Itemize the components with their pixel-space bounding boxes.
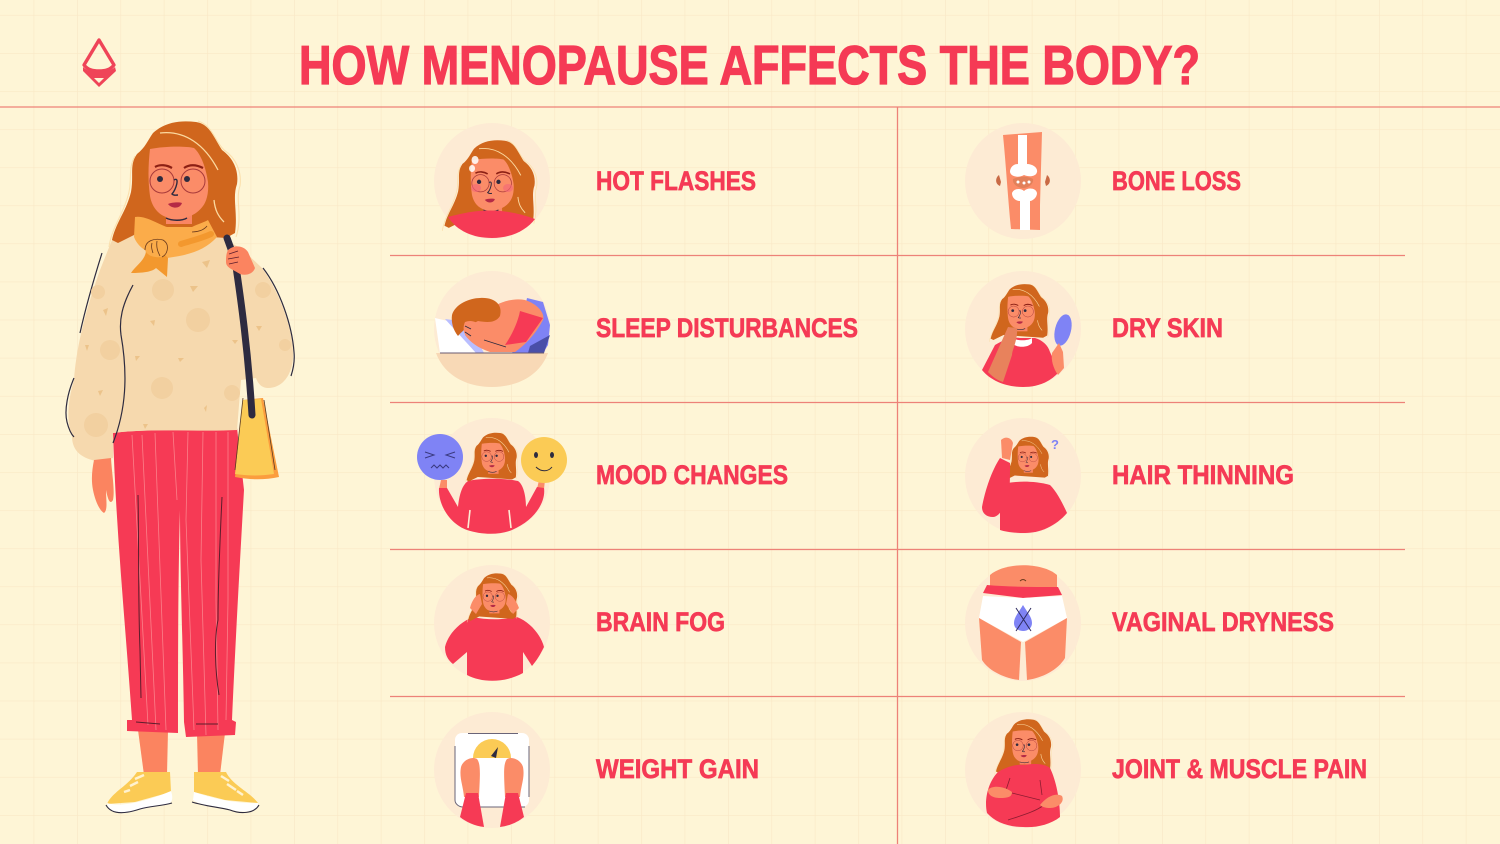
red top <box>505 311 543 345</box>
label: weight gain: WEIGHT GAIN <box>596 754 759 784</box>
raised arm <box>982 458 1010 517</box>
cheeks <box>471 184 513 192</box>
item: joint and muscle pain <box>965 712 1081 828</box>
sweater <box>66 232 294 461</box>
head <box>995 719 1052 775</box>
head <box>1004 437 1050 481</box>
lower bone <box>1012 189 1037 230</box>
scale <box>455 733 529 807</box>
label: mood changes: MOOD CHANGES <box>596 460 788 490</box>
woman figure <box>66 121 294 813</box>
sweater <box>986 764 1060 827</box>
sleeping body <box>465 299 543 352</box>
right trouser leg <box>500 793 524 827</box>
icon circle <box>434 418 550 534</box>
icon circle <box>434 712 550 828</box>
item: vaginal dryness <box>965 565 1081 681</box>
right thigh <box>1025 618 1067 680</box>
needle <box>491 747 498 758</box>
sweater <box>1000 482 1067 533</box>
crossed arm lines <box>1006 778 1044 820</box>
waistband <box>983 585 1062 598</box>
right foot <box>504 758 524 797</box>
collar <box>1012 338 1032 347</box>
icon circle <box>434 271 550 387</box>
right hand <box>1040 795 1063 808</box>
mirror <box>1051 313 1075 347</box>
icon circle <box>434 123 550 239</box>
label: brain fog: BRAIN FOG <box>596 607 725 637</box>
left trouser leg <box>460 793 484 827</box>
gauge <box>473 739 511 758</box>
icon circle <box>434 565 550 681</box>
head <box>109 121 240 247</box>
left hand <box>988 787 1012 798</box>
sweater <box>448 210 535 238</box>
hands on temples <box>470 594 519 614</box>
label: joint and muscle pain: JOINT & MUSCLE PAIN <box>1112 754 1367 784</box>
logo <box>83 40 116 87</box>
left shoe <box>106 772 172 813</box>
face <box>464 321 486 342</box>
crossed out mark <box>1016 608 1031 631</box>
column divider <box>896 107 898 844</box>
label: hot flashes: HOT FLASHES <box>596 166 756 196</box>
sad emoji <box>417 434 463 480</box>
joint brackets <box>996 175 1050 186</box>
worn cartilage <box>1013 177 1033 188</box>
head with hot flash <box>442 140 537 231</box>
bed <box>436 353 548 387</box>
head <box>467 573 518 622</box>
row dividers <box>390 256 1405 696</box>
label: hair thinning: HAIR THINNING <box>1112 460 1294 490</box>
hair <box>452 298 501 336</box>
item: hot flashes <box>434 123 550 239</box>
right hand <box>226 246 255 275</box>
underwear <box>979 596 1067 642</box>
left thigh <box>979 618 1021 680</box>
head <box>989 284 1050 342</box>
navel <box>1020 580 1026 581</box>
question mark: ? <box>1051 437 1059 452</box>
closed eyes <box>465 326 506 347</box>
label: vaginal dryness: VAGINAL DRYNESS <box>1112 607 1334 637</box>
item: hair thinning <box>965 418 1081 534</box>
head <box>465 433 518 483</box>
happy emoji <box>521 437 567 483</box>
item: bone loss <box>965 123 1081 239</box>
sweat drops <box>469 156 479 172</box>
icon circle <box>965 712 1081 828</box>
right leg skin <box>197 733 225 775</box>
shoulder bag <box>235 398 279 479</box>
hands <box>439 480 545 489</box>
pillow <box>435 318 484 353</box>
icon circle <box>965 565 1081 681</box>
icon circle <box>965 123 1081 239</box>
left leg skin <box>138 730 168 775</box>
scarf <box>131 217 217 277</box>
belly <box>990 565 1057 590</box>
icon circle <box>965 271 1081 387</box>
droplet <box>1014 605 1032 631</box>
item: brain fog <box>434 565 550 681</box>
arm and hand on face <box>988 327 1017 382</box>
red striped trousers <box>113 428 244 737</box>
sweater <box>982 338 1059 387</box>
title: HOW MENOPAUSE AFFECTS THE BODY? <box>299 34 1200 96</box>
left foot <box>460 758 480 797</box>
hand on head <box>1001 438 1013 460</box>
mirror hand <box>1052 343 1064 375</box>
right shoe <box>192 772 259 813</box>
blanket <box>512 298 550 353</box>
label: sleep disturbances: SLEEP DISTURBANCES <box>596 313 858 343</box>
label: bone loss: BONE LOSS <box>1112 166 1241 196</box>
arm gaps <box>468 510 511 528</box>
icon circle <box>965 418 1081 534</box>
left hand <box>92 458 114 513</box>
item: mood changes <box>417 418 567 534</box>
header divider <box>0 106 1500 108</box>
sweater with raised arms <box>439 479 544 534</box>
sweater <box>445 617 544 681</box>
item: weight gain <box>434 712 550 828</box>
label: dry skin: DRY SKIN <box>1112 313 1223 343</box>
knee skin <box>1003 132 1042 230</box>
item: sleep disturbances <box>434 271 550 387</box>
bed line <box>440 352 544 354</box>
item: dry skin <box>965 271 1081 387</box>
bag strap <box>227 238 252 415</box>
upper bone <box>1010 135 1037 177</box>
